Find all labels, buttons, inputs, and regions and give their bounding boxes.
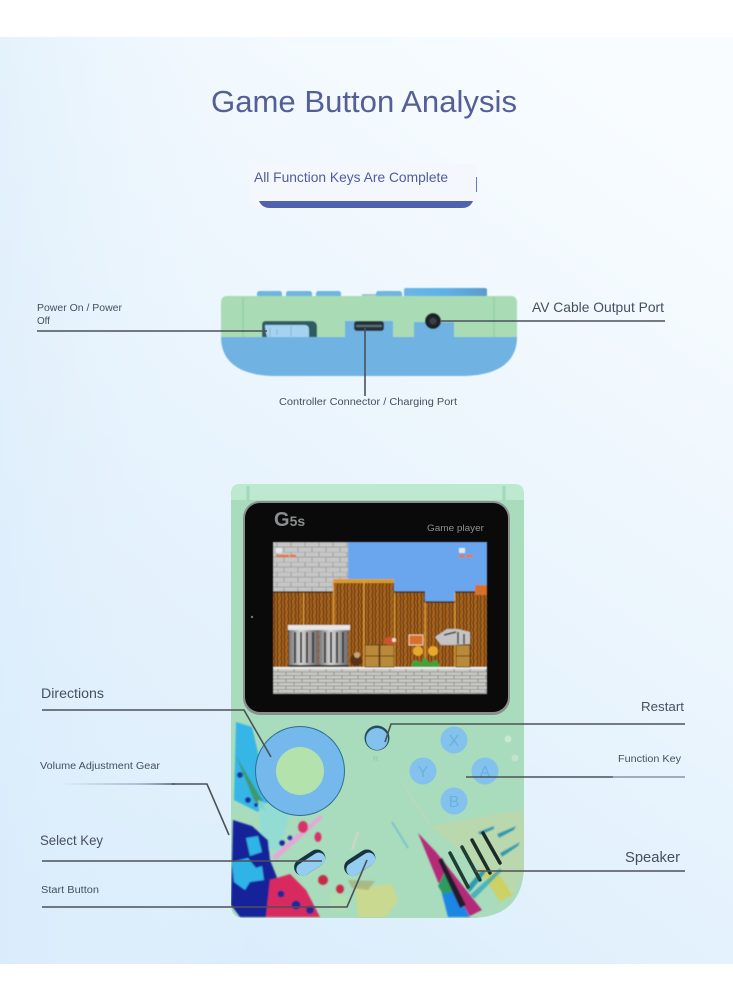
callout: speaker: Speaker bbox=[625, 850, 680, 866]
callout: power switch: Off bbox=[37, 315, 50, 327]
restart button: R bbox=[373, 756, 378, 763]
callout: AV port: AV Cable Output Port bbox=[532, 299, 664, 315]
power switch bbox=[262, 321, 317, 337]
directional joystick bbox=[255, 726, 345, 816]
fence bbox=[273, 579, 487, 668]
subtitle pill bbox=[250, 164, 477, 208]
function buttons bbox=[410, 726, 498, 814]
callout: power switch: Power On / Power bbox=[37, 302, 122, 314]
callout: volume bbox=[40, 761, 229, 835]
green shell bbox=[221, 296, 517, 340]
game player label: Game player bbox=[427, 523, 484, 533]
callout: directions bbox=[41, 686, 271, 757]
paint splatter bbox=[231, 722, 524, 917]
sign bbox=[409, 635, 423, 645]
trash cans bbox=[288, 625, 350, 667]
top view of console bbox=[221, 288, 517, 376]
chipmunks bbox=[350, 637, 397, 666]
function buttons: A bbox=[480, 764, 491, 781]
enemy bbox=[435, 629, 470, 645]
callout: restart: Restart bbox=[641, 699, 684, 714]
crates bbox=[365, 645, 470, 667]
charging port bbox=[345, 321, 393, 337]
function buttons: X bbox=[449, 733, 460, 750]
screen bezel bbox=[243, 501, 510, 715]
subtitle text: All Function Keys Are Complete bbox=[254, 169, 448, 185]
title: Game Button Analysis bbox=[211, 84, 517, 119]
brand logo: G5s bbox=[274, 509, 305, 531]
function buttons: B bbox=[449, 794, 459, 811]
AV port bbox=[414, 313, 454, 337]
flowers bbox=[411, 646, 440, 667]
top buttons bbox=[257, 288, 487, 298]
select button bbox=[291, 846, 329, 879]
callout: start: Start Button bbox=[41, 885, 99, 896]
callout: directions: Directions bbox=[41, 686, 104, 701]
game screen bbox=[273, 542, 487, 694]
callout: restart bbox=[385, 699, 685, 742]
callout: function key: Function Key bbox=[618, 754, 681, 765]
body shell bbox=[231, 484, 524, 918]
restart button bbox=[364, 726, 390, 763]
ground bbox=[273, 667, 487, 694]
handheld console front bbox=[231, 484, 524, 918]
callout: power switch bbox=[37, 302, 267, 331]
callout: volume: Volume Adjustment Gear bbox=[40, 761, 161, 772]
callout: select: Select Key bbox=[40, 832, 103, 848]
blue base bbox=[221, 337, 517, 376]
callout: start bbox=[41, 860, 367, 907]
speaker slits bbox=[450, 833, 500, 887]
function buttons: Y bbox=[418, 764, 429, 781]
callout: charging port: Controller Connector / Charging Port bbox=[279, 396, 457, 408]
HUD bbox=[276, 548, 473, 556]
start button bbox=[341, 846, 379, 879]
